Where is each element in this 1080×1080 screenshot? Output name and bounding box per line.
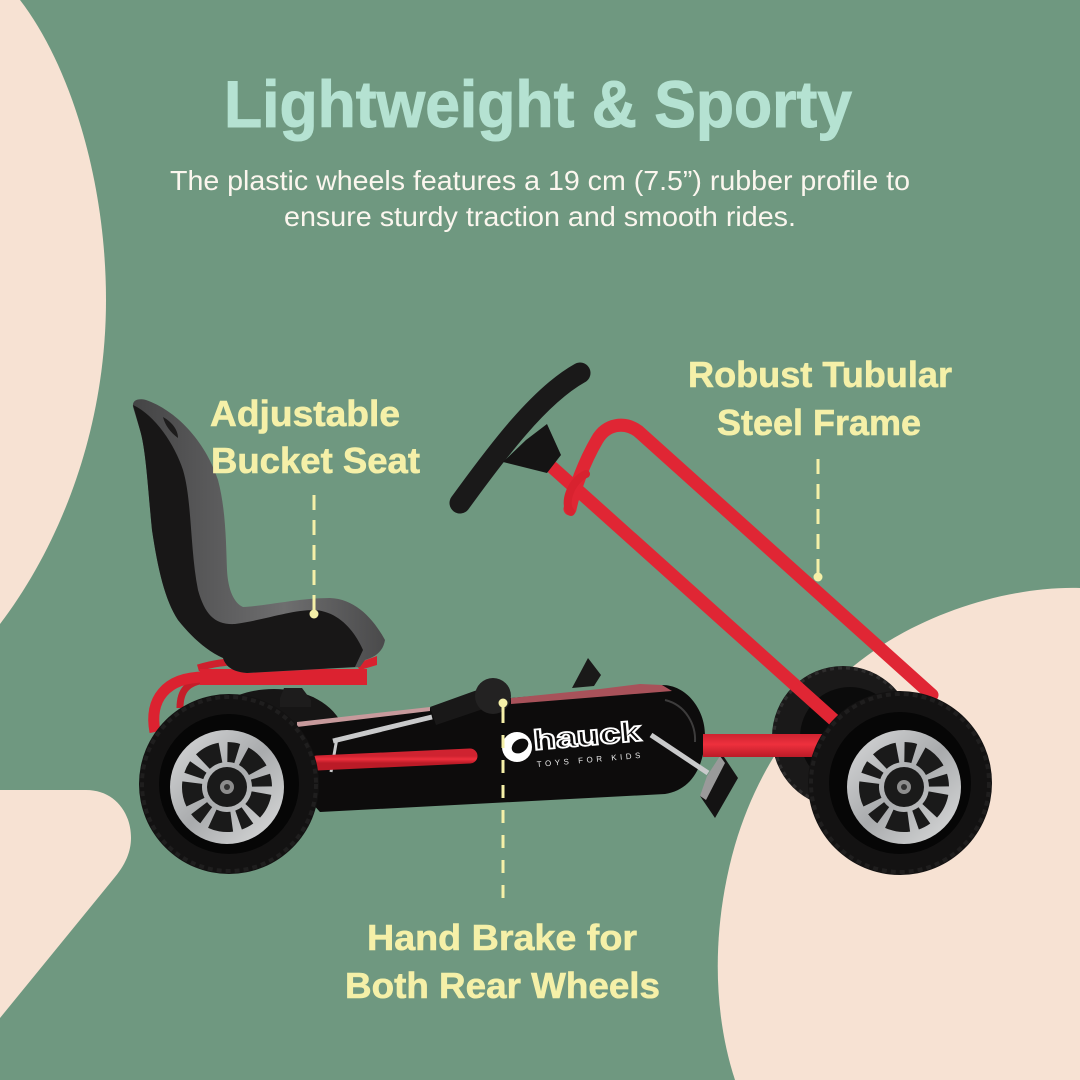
hauck logo [502,716,643,769]
callout: steel frame [688,354,952,582]
rear far wheel [225,689,342,735]
front near wheel [808,691,992,875]
red side tube [317,756,470,763]
background blob: lower left [0,790,131,1018]
callout: bucket seat: Adjustable [210,393,400,434]
background blob: upper left [0,0,106,624]
go-kart [133,373,992,875]
description text: ensure sturdy traction and smooth rides. [284,201,796,232]
description text [170,165,910,232]
hauck logo: hauck [532,716,643,756]
hauck logo: TOYS FOR KIDS [536,751,641,769]
hand brake lever [430,689,495,725]
red tubular frame [553,425,932,720]
callout: bucket seat [210,393,420,618]
front far wheel [772,666,914,808]
body shine [665,700,695,742]
front pedal [651,735,738,818]
description text: The plastic wheels features a 19 cm (7.5”) rubber profile to [170,165,910,196]
callout: hand brake: Hand Brake for [367,917,637,958]
brake knob [475,678,511,714]
bucket seat [133,399,385,673]
red seat frame [154,656,377,732]
callout: hand brake [345,698,660,1006]
brake rod [333,717,432,741]
callout: bucket seat: Bucket Seat [211,440,420,481]
go-kart body [297,658,705,812]
steering wheel [460,373,580,503]
callout: steel frame: Steel Frame [717,402,921,443]
far pedal [572,658,601,688]
title: Lightweight & Sporty [224,67,852,141]
top stripe [297,707,430,727]
background blob: lower right [718,588,1080,1080]
seat bolt [280,688,311,707]
callout: steel frame: Robust Tubular [688,354,952,395]
horizontal red tube [703,734,823,757]
callout: hand brake: Both Rear Wheels [345,965,660,1006]
rear near wheel [139,694,319,874]
